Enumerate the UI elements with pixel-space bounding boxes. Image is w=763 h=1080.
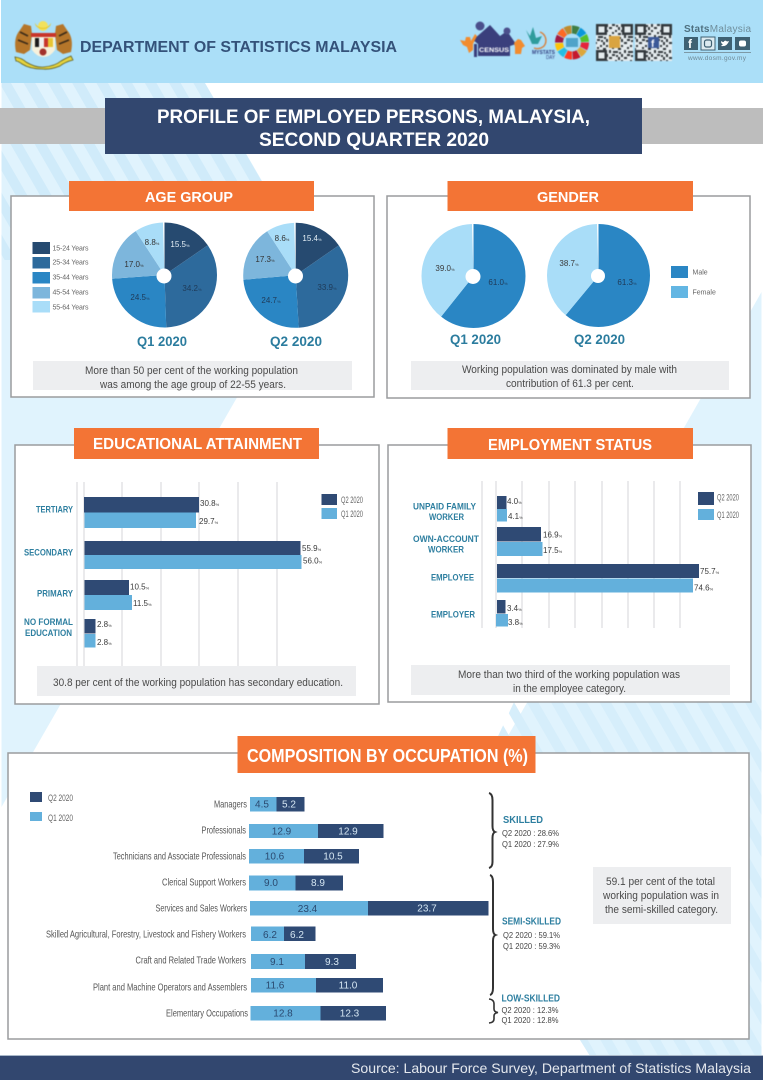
- legend: gender: [671, 266, 716, 298]
- pie chart: age group Q1 2020: 24.5%: [130, 293, 150, 302]
- note: occupation: [593, 867, 731, 924]
- bar chart: employment status: UNPAID FAMILY: [413, 502, 477, 512]
- bar chart: educational attainment: 11.5%: [133, 599, 152, 608]
- icon: coat of arms: [15, 21, 73, 69]
- bar chart: occupation composition: Elementary Occupations: [166, 1008, 248, 1020]
- note: employment status: More than two third of the working population was: [458, 669, 680, 681]
- bar chart: occupation composition: 11.6: [266, 980, 285, 992]
- bracket: low-skilled: [489, 999, 498, 1023]
- bar chart: occupation composition: 23.7: [417, 904, 437, 914]
- heading: employment status: [448, 428, 693, 459]
- heading: gender: [448, 181, 693, 211]
- bar chart: occupation composition: 12.9: [272, 826, 292, 838]
- bar chart: employment status: 3.8%: [508, 618, 523, 627]
- bar chart: occupation composition: 6.2: [290, 930, 304, 941]
- pie chart: age group Q2 2020: 17.3%: [255, 255, 275, 264]
- bar chart: employment status: OWN-ACCOUNT: [413, 534, 479, 545]
- icon: SDG wheel: [559, 30, 585, 56]
- pie chart: age group Q2 2020: 24.7%: [261, 296, 281, 305]
- note: gender: contribution of 61.3 per cent.: [506, 378, 634, 390]
- legend: gender: Female: [692, 290, 716, 296]
- note: age group: was among the age group of 22-55 years.: [99, 379, 286, 391]
- pie chart: gender Q2 2020: 38.7%: [559, 259, 579, 268]
- pie chart: age group Q2 2020: [255, 234, 337, 305]
- group: semi-skilled: SEMI-SKILLED: [502, 916, 561, 928]
- group: skilled: SKILLED: [503, 814, 543, 826]
- pie chart: gender Q1 2020: [435, 250, 508, 302]
- bar chart: occupation composition: Clerical Support Workers: [162, 876, 246, 888]
- header banner: [1, 0, 763, 83]
- bar chart: educational attainment: 29.7%: [199, 517, 219, 526]
- note: gender: [411, 361, 729, 390]
- title: [157, 107, 590, 151]
- bar chart: occupation composition: 10.5: [323, 852, 343, 862]
- StatsMalaysia social block: www.dosm.gov.my: [687, 55, 747, 62]
- bar chart: educational attainment: [24, 482, 323, 666]
- bar chart: occupation composition: 12.8: [273, 1008, 293, 1020]
- caption: Q1 2020: Q1 2020: [137, 333, 187, 349]
- bracket: semi-skilled: [490, 875, 496, 995]
- legend: age bands: 45-54 Years: [52, 290, 89, 296]
- title band: [0, 98, 763, 154]
- pie chart: gender Q2 2020: [559, 250, 637, 301]
- caption: Q1 2020: Q1 2020: [450, 331, 501, 347]
- icon: census logo: CENSUS: [479, 47, 510, 54]
- bar chart: occupation composition: 8.9: [311, 878, 325, 889]
- note: employment status: in the employee category.: [513, 683, 626, 695]
- footer: [0, 1055, 763, 1080]
- legend: age bands: [32, 242, 89, 312]
- note: age group: [33, 361, 352, 391]
- group: skilled: [502, 814, 559, 849]
- bar chart: educational attainment: PRIMARY: [37, 588, 74, 600]
- icon: QR code 2: [635, 24, 672, 61]
- group: low-skilled: Q1 2020 : 12.8%: [502, 1015, 559, 1025]
- legend: age bands: 35-44 Years: [52, 274, 89, 282]
- note: age group: More than 50 per cent of the working population: [85, 365, 298, 377]
- bar chart: occupation composition: 23.4: [298, 904, 318, 915]
- heading: age group: [69, 181, 314, 211]
- legend: employment status: Q2 2020: [717, 492, 739, 502]
- bar chart: employment status: 4.1%: [508, 512, 523, 521]
- bar chart: employment status: EMPLOYEE: [431, 572, 474, 584]
- panel: composition by occupation: [8, 736, 749, 1039]
- heading: educational attainment: EDUCATIONAL ATTAINMENT: [93, 436, 302, 453]
- legend: employment status: Q1 2020: [717, 510, 739, 520]
- bar chart: occupation composition: [46, 797, 488, 1020]
- group: skilled: Q2 2020 : 28.6%: [502, 828, 559, 838]
- heading: composition by occupation: [238, 736, 536, 773]
- bar chart: occupation composition: Managers: [214, 798, 247, 810]
- bar chart: employment status: 17.5%: [543, 546, 563, 555]
- group: low-skilled: Q2 2020 : 12.3%: [502, 1005, 559, 1015]
- bar chart: employment status: 75.7%: [700, 567, 720, 576]
- bar chart: occupation composition: Professionals: [202, 824, 246, 836]
- footer: Source: Labour Force Survey, Department of Statistics Malaysia: [351, 1060, 751, 1076]
- heading: age group: AGE GROUP: [145, 189, 233, 206]
- group: low-skilled: LOW-SKILLED: [502, 992, 560, 1004]
- bar chart: occupation composition: 9.3: [325, 957, 339, 968]
- bar chart: occupation composition: 5.2: [282, 800, 296, 810]
- note: occupation: the semi-skilled category.: [605, 904, 718, 916]
- title: SECOND QUARTER 2020: [259, 130, 489, 151]
- note: occupation: working population was in: [602, 890, 719, 902]
- bracket: skilled: [489, 793, 495, 868]
- bar chart: occupation composition: 9.1: [270, 957, 284, 968]
- pie chart: age group Q1 2020: 15.5%: [170, 240, 190, 249]
- pie chart: age group Q1 2020: [124, 238, 202, 302]
- heading: educational attainment: [74, 428, 319, 459]
- pie chart: gender Q1 2020: 39.0%: [435, 264, 455, 273]
- heading: composition by occupation: COMPOSITION BY OCCUPATION (%): [247, 746, 528, 766]
- bar chart: occupation composition: 6.2: [263, 930, 277, 941]
- heading: employment status: EMPLOYMENT STATUS: [488, 437, 652, 454]
- legend: age bands: 25-34 Years: [52, 260, 89, 266]
- bar chart: educational attainment: NO FORMAL: [24, 617, 73, 628]
- StatsMalaysia social block: StatsMalaysia: [684, 24, 751, 35]
- panel: educational attainment: [15, 428, 379, 704]
- legend: educational attainment: Q2 2020: [341, 495, 363, 505]
- caption: Q2 2020: Q2 2020: [270, 333, 322, 349]
- bar chart: employment status: WORKER: [428, 544, 464, 556]
- group: semi-skilled: Q1 2020 : 59.3%: [503, 941, 560, 951]
- note: gender: Working population was dominated by male with: [462, 364, 677, 376]
- StatsMalaysia social block: f: [688, 37, 693, 51]
- legend: gender: Male: [692, 270, 708, 276]
- title: PROFILE OF EMPLOYED PERSONS, MALAYSIA,: [157, 107, 590, 128]
- bar chart: employment status: [413, 481, 720, 628]
- pie chart: age group Q2 2020: 33.9%: [317, 283, 337, 292]
- pie chart: gender Q1 2020: 61.0%: [488, 278, 508, 287]
- bar chart: employment status: WORKER: [429, 512, 464, 523]
- group: semi-skilled: Q2 2020 : 59.1%: [503, 930, 560, 940]
- bar chart: occupation composition: 4.5: [255, 800, 269, 810]
- pie chart: age group Q1 2020: 17.0%: [124, 260, 144, 269]
- legend: occupation: [30, 792, 73, 823]
- bar chart: employment status: 3.4%: [507, 604, 522, 613]
- bar chart: occupation composition: 10.6: [265, 852, 285, 862]
- legend: age bands: 55-64 Years: [52, 304, 89, 312]
- legend: occupation: Q1 2020: [48, 813, 73, 823]
- note: employment status: [411, 665, 730, 695]
- group: skilled: Q1 2020 : 27.9%: [502, 839, 559, 849]
- icon: MyStats Day logo: [526, 27, 556, 61]
- group: semi-skilled: [502, 916, 561, 951]
- bar chart: educational attainment: EDUCATION: [25, 628, 72, 639]
- pie chart: gender Q2 2020: 61.3%: [617, 278, 637, 287]
- legend: employment status: [698, 492, 739, 520]
- bar chart: employment status: 4.0%: [507, 497, 522, 506]
- pie chart: age group Q1 2020: 8.8%: [145, 238, 160, 247]
- bar chart: occupation composition: Technicians and Associate Professionals: [113, 850, 246, 862]
- note: educational attainment: [37, 666, 356, 696]
- StatsMalaysia social block: [684, 24, 751, 62]
- legend: age bands: 15-24 Years: [52, 246, 89, 252]
- bar chart: educational attainment: 2.8%: [97, 638, 112, 647]
- bar chart: occupation composition: Plant and Machine Operators and Assemblers: [93, 982, 247, 994]
- bar chart: educational attainment: 56.0%: [303, 556, 323, 566]
- bar chart: employment status: EMPLOYER: [431, 610, 475, 620]
- bar chart: educational attainment: SECONDARY: [24, 548, 74, 558]
- bar chart: educational attainment: 55.9%: [302, 544, 322, 553]
- bar chart: employment status: 16.9%: [543, 530, 563, 540]
- pie chart: age group Q1 2020: 34.2%: [182, 284, 202, 293]
- bar chart: occupation composition: Craft and Related Trade Workers: [136, 954, 246, 966]
- pie chart: age group Q2 2020: 8.6%: [275, 234, 290, 243]
- bar chart: educational attainment: 2.8%: [97, 620, 112, 629]
- header department name: DEPARTMENT OF STATISTICS MALAYSIA: [80, 39, 397, 56]
- group: low-skilled: [502, 992, 560, 1025]
- panel: employment status: [388, 428, 751, 702]
- icon: QR code 1: [596, 24, 633, 61]
- bar chart: employment status: 74.6%: [694, 584, 714, 592]
- icon: MyStats Day logo: DAY: [546, 55, 556, 61]
- legend: occupation: Q2 2020: [48, 793, 73, 803]
- bar chart: educational attainment: 10.5%: [130, 582, 150, 592]
- heading: gender: GENDER: [537, 189, 599, 206]
- note: occupation: 59.1 per cent of the total: [606, 876, 715, 888]
- icon: MyStats Day logo: MYSTATS: [532, 50, 555, 56]
- icon: QR code 2: f: [651, 39, 655, 50]
- icon: census logo: [460, 22, 525, 57]
- bar chart: educational attainment: TERTIARY: [36, 504, 74, 516]
- bar chart: occupation composition: 11.0: [339, 980, 358, 992]
- bar chart: occupation composition: Services and Sales Workers: [156, 902, 247, 914]
- bar chart: occupation composition: Skilled Agricultural, Forestry, Livestock and Fishery Workers: [46, 928, 246, 940]
- legend: educational attainment: Q1 2020: [341, 509, 363, 519]
- bar chart: occupation composition: 12.9: [338, 826, 358, 838]
- bar chart: occupation composition: 9.0: [264, 878, 278, 889]
- panel: gender: [387, 181, 750, 398]
- pie chart: age group Q2 2020: 15.4%: [302, 234, 322, 243]
- bar chart: occupation composition: 12.3: [340, 1008, 360, 1020]
- panel: age group: [11, 181, 374, 397]
- legend: educational attainment: [322, 494, 363, 519]
- caption: Q2 2020: Q2 2020: [574, 331, 625, 347]
- bar chart: educational attainment: 30.8%: [200, 499, 220, 508]
- note: educational attainment: 30.8 per cent of the working population has secondary education.: [53, 677, 343, 689]
